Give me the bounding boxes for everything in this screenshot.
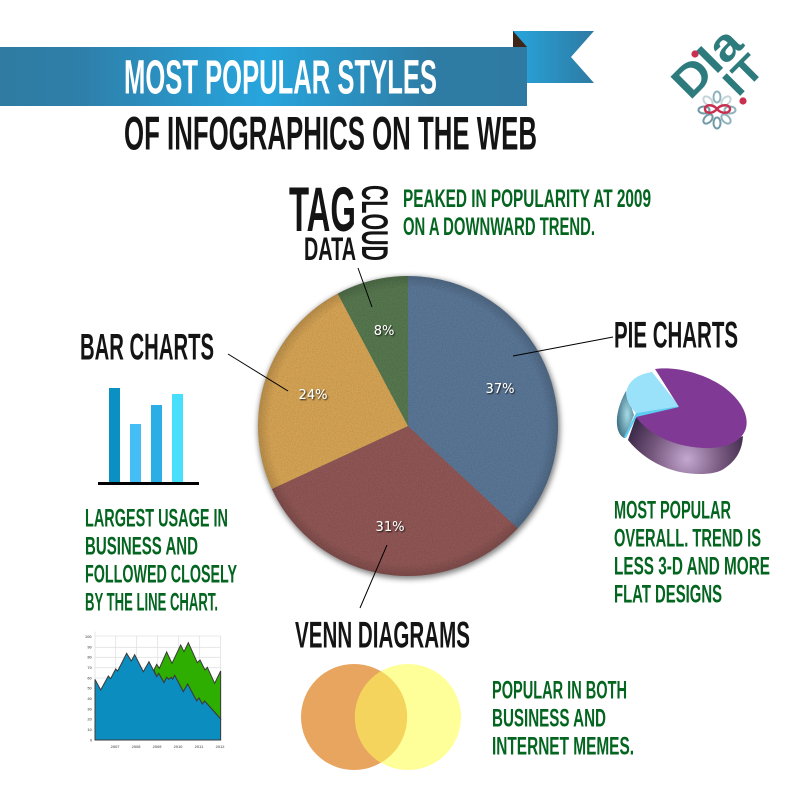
logo [661,16,772,128]
pie slice: 31% [272,426,518,576]
area chart: 2007 [111,744,120,749]
area chart: 10 [87,727,93,732]
bar charts description: FOLLOWED CLOSELY [85,560,237,588]
venn description: POPULAR IN BOTH [492,676,627,704]
title: MOST POPULAR STYLES [124,52,437,104]
area chart: 2011 [195,744,204,749]
pie charts description [614,496,770,608]
pie chart [258,276,560,579]
area chart: 2010 [174,744,183,749]
logo: IT [715,46,772,104]
bar charts description: LARGEST USAGE IN [85,504,228,532]
area chart [85,632,225,749]
logo: DIa [661,16,753,108]
icon: 3D pie chart [617,368,747,474]
percent labels: 8% [374,324,394,339]
tag cloud wordmark [289,175,395,267]
pie slice: 24% [258,294,408,489]
area chart: 20 [87,717,93,722]
venn description [492,676,634,760]
area chart: 90 [87,645,93,650]
tag cloud description [403,185,651,241]
area chart: 80 [87,655,93,660]
tag cloud wordmark: TAG [289,175,356,245]
heading: bar charts: BAR CHARTS [80,326,214,368]
tag cloud wordmark: DATA [304,231,356,267]
percent labels: 24% [299,388,327,403]
area chart: 2008 [132,744,141,749]
area chart: 2009 [153,744,162,749]
bar charts description [85,504,237,616]
bar charts description: BY THE LINE CHART. [85,588,218,616]
pie slice: 37% [408,276,558,528]
icon: bar chart [98,388,199,485]
title [124,52,537,160]
area chart: 60 [87,675,93,680]
area chart: 30 [87,706,93,711]
area chart: 70 [87,665,93,670]
percent labels [299,324,514,535]
tag cloud description: PEAKED IN POPULARITY AT 2009 [403,185,651,213]
heading: venn diagrams: VENN DIAGRAMS [295,614,470,656]
area chart: 2012 [216,744,225,749]
tag cloud wordmark: CLOUD [354,185,395,261]
area chart: 100 [85,634,92,639]
bar charts description: BUSINESS AND [85,532,198,560]
leader lines [228,268,613,608]
logo flower [698,92,736,128]
venn description: BUSINESS AND [492,704,606,732]
tag cloud description: ON A DOWNWARD TREND. [403,213,595,241]
area chart: 50 [87,686,93,691]
venn diagram [301,664,461,770]
area chart: 0 [90,737,93,742]
percent labels: 37% [486,382,514,397]
area chart: 40 [87,696,93,701]
pie slice: 8% [338,276,408,426]
percent labels: 31% [376,520,404,535]
pie charts description: FLAT DESIGNS [614,580,722,608]
ribbon banner [0,31,594,106]
venn description: INTERNET MEMES. [492,732,634,760]
